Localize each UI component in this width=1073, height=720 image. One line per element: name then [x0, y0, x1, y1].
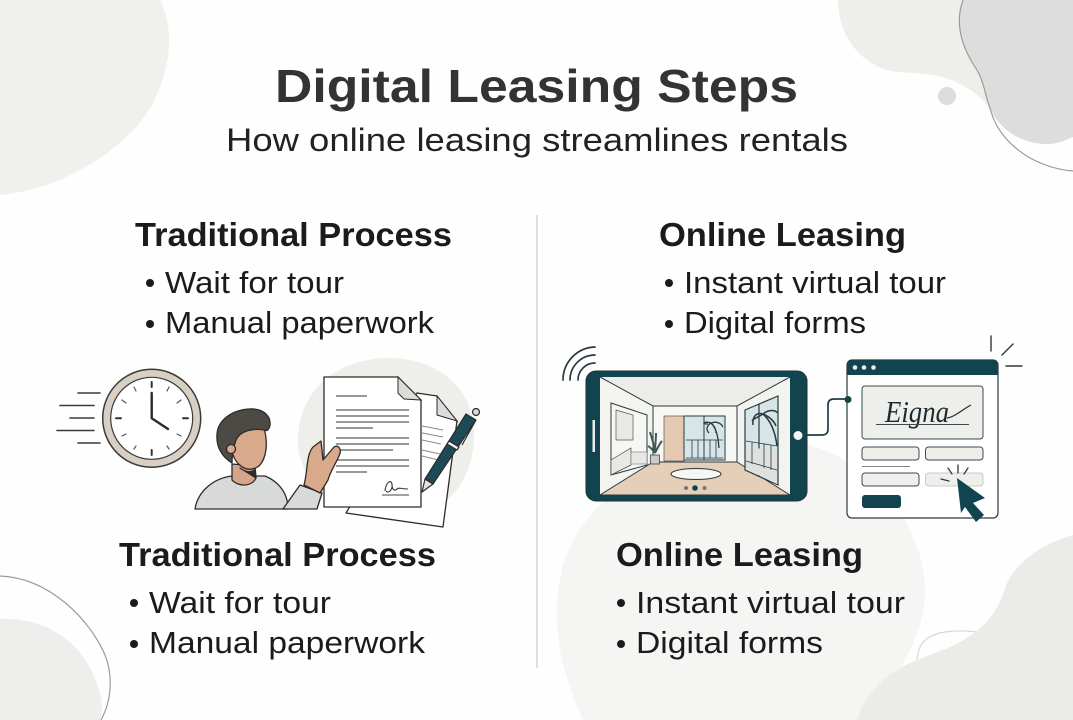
icon: arm and hand holding document: [283, 441, 340, 509]
panel: traditional process bottom text: [119, 536, 436, 660]
panel: online leasing top text: [659, 216, 946, 340]
heading: online leasing: Online Leasing: [659, 216, 906, 253]
icon: sparkle lines: [991, 336, 1022, 366]
icon: tablet with virtual tour: [586, 371, 807, 501]
icon: speed lines: [57, 393, 100, 443]
icon: pen: [422, 408, 480, 492]
icon: person: [195, 409, 288, 509]
icon: browser signature form: [847, 360, 998, 522]
bullet: digital forms: Digital forms: [684, 306, 866, 340]
icon: front document: [324, 377, 421, 507]
bullet: instant virtual tour lower: Instant virtual tour: [636, 586, 905, 620]
panel: online leasing bottom text: [616, 536, 905, 660]
bullet: wait for tour: Wait for tour: [165, 266, 344, 300]
heading: traditional process lower: Traditional Process: [119, 536, 436, 573]
click burst: [941, 465, 968, 481]
heading: traditional process: Traditional Process: [135, 216, 452, 253]
bullet: wait for tour lower: Wait for tour: [149, 586, 331, 620]
connector line: [807, 399, 848, 435]
heading: online leasing lower: Online Leasing: [616, 536, 863, 573]
icon: clock: [103, 369, 201, 467]
bullet: instant virtual tour: Instant virtual tour: [684, 266, 946, 300]
bullet: manual paperwork lower: Manual paperwork: [149, 626, 426, 660]
icon: back document: [346, 393, 457, 527]
plant: [648, 432, 662, 464]
title: Digital Leasing Steps: [275, 60, 798, 112]
subtitle: How online leasing streamlines rentals: [226, 122, 848, 158]
icon: cursor: [957, 478, 985, 522]
blob behind documents: [298, 358, 474, 505]
illustration: online leasing: [563, 336, 1022, 522]
illustration: traditional process: [57, 358, 480, 527]
icon: wifi waves: [563, 347, 595, 380]
bullet: digital forms lower: Digital forms: [636, 626, 823, 660]
panel: traditional process top text: [135, 216, 452, 340]
bullet: manual paperwork: Manual paperwork: [165, 306, 435, 340]
signature: Eigna: [884, 394, 949, 429]
